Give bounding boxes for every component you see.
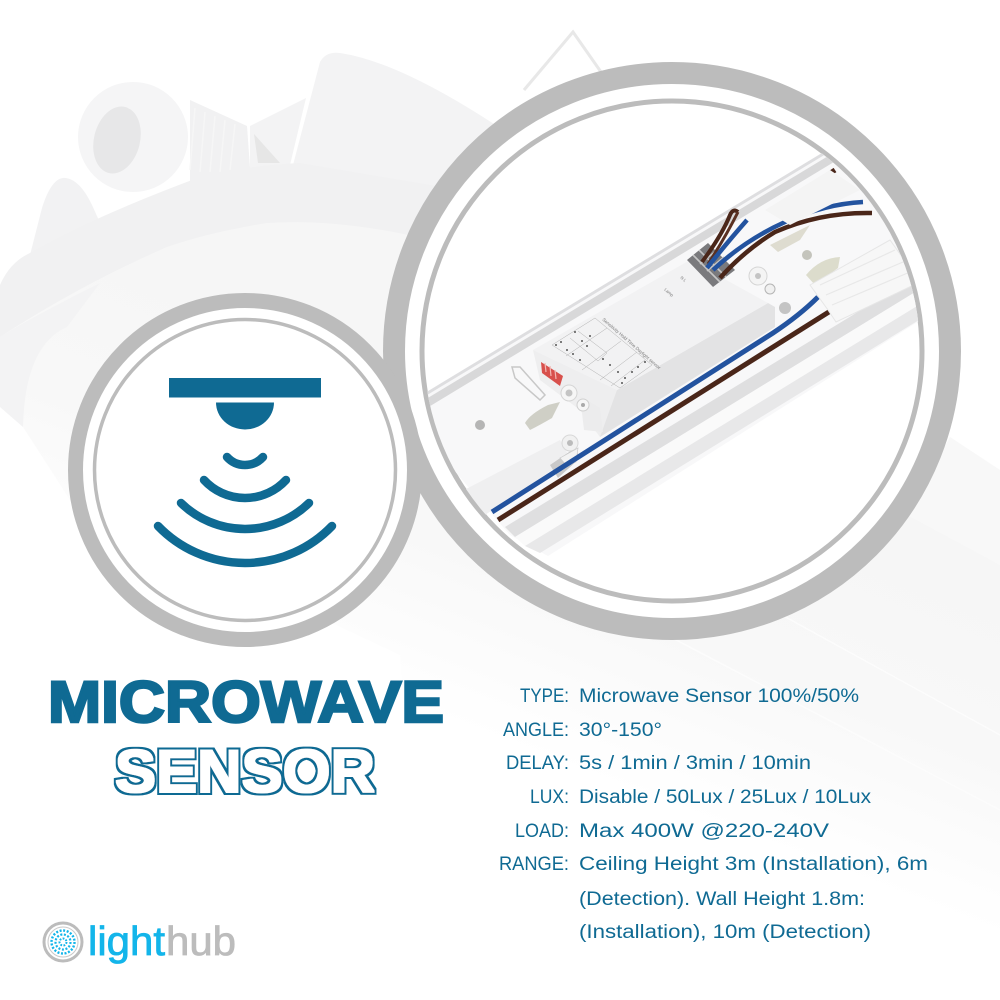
icon: microwave sensor [158, 378, 332, 563]
sensor driver box [533, 260, 791, 465]
sensor settings table [552, 318, 652, 388]
specification list: Microwave Sensor 100%/50% [579, 686, 859, 707]
title: MICROWAVE [48, 670, 444, 735]
specification list: ANGLE: [503, 720, 569, 741]
wire connectors [782, 170, 912, 322]
sensor driver box: N L [679, 275, 688, 283]
specification list: Ceiling Height 3m (Installation), 6m [579, 854, 928, 875]
specification list: LOAD: [515, 821, 569, 842]
sensor driver box: Lamp [663, 287, 675, 298]
specification list: 5s / 1min / 3min / 10min [579, 753, 811, 774]
terminal block [687, 243, 735, 287]
specification list [499, 686, 928, 943]
logo: lighthub: hub [166, 918, 236, 964]
panel: sensor icon circle [76, 300, 414, 640]
logo: lighthub: light [88, 918, 166, 964]
specification list: DELAY: [506, 753, 569, 774]
panel: product close-up circle [394, 73, 960, 629]
sensor driver box: Sensitivity Hold Time Daylight sensor [601, 317, 662, 371]
brown and blue wires [492, 170, 872, 520]
specification list: (Installation), 10m (Detection) [579, 922, 871, 943]
title [48, 670, 444, 805]
specification list: RANGE: [499, 854, 569, 875]
title: SENSOR [115, 738, 375, 805]
specification list: 30°-150° [579, 720, 662, 741]
product photo: fixture tray with sensor [427, 153, 918, 553]
specification list: TYPE: [520, 686, 569, 707]
specification list: Disable / 50Lux / 25Lux / 10Lux [579, 787, 872, 808]
specification list: Max 400W @220-240V [579, 821, 829, 842]
specification list: (Detection). Wall Height 1.8m: [579, 889, 865, 910]
logo: lighthub [44, 918, 236, 964]
specification list: LUX: [530, 787, 569, 808]
